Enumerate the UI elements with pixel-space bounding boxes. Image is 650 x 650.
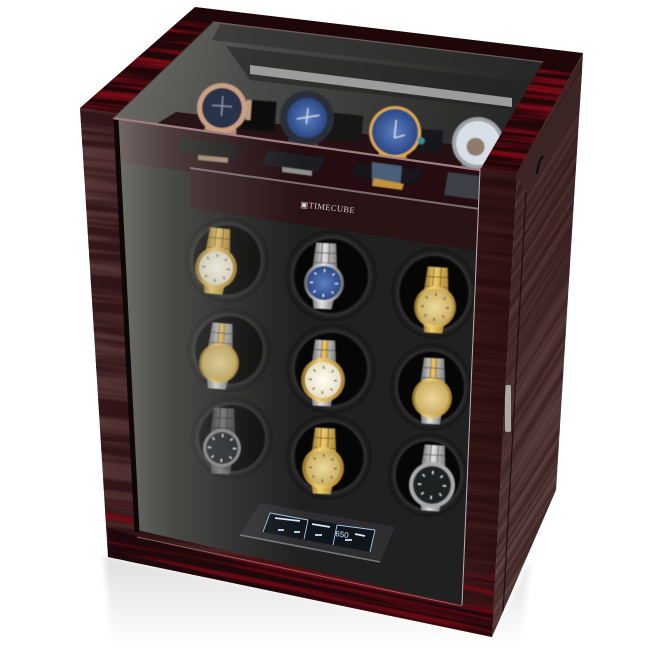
control display <box>240 503 395 562</box>
winder: row 3 left <box>198 403 273 475</box>
upper shelf <box>116 119 480 215</box>
winder: row 2 left <box>194 314 270 390</box>
door seam <box>503 192 526 612</box>
watch: black bezel blue dial <box>280 90 364 146</box>
LED strip <box>250 65 512 107</box>
right side panel <box>485 50 585 640</box>
watch: rose gold chronograph <box>196 82 277 134</box>
winder: row 3 centre <box>286 414 372 500</box>
floor reflection <box>104 556 530 644</box>
top wood panel <box>75 5 585 187</box>
winder: row 2 centre <box>286 324 376 414</box>
glass edge lines <box>113 118 480 170</box>
illustration: watch winder cabinet <box>80 7 583 637</box>
top miter <box>517 68 583 192</box>
watch: gold blue dial <box>368 105 444 158</box>
top glass and upper compartment <box>113 22 543 184</box>
screen value: 650 <box>335 529 350 540</box>
back panel <box>120 162 476 605</box>
rear band <box>212 24 543 78</box>
winder: row 3 right <box>388 433 468 517</box>
screen <box>263 513 375 552</box>
winder: row 2 right <box>390 343 472 431</box>
side highlight bar <box>505 385 511 432</box>
shelf <box>158 112 492 166</box>
front wood frame <box>75 104 525 650</box>
glass reflection <box>116 120 276 560</box>
watch: silver skeleton dial <box>451 116 502 170</box>
brand name: ▣TIMECUBE <box>300 199 356 215</box>
header with brand <box>190 167 480 251</box>
watch lower straps through glass <box>176 137 480 200</box>
winder: row 1 centre <box>285 230 377 322</box>
winder: row 1 left <box>192 223 268 296</box>
winder: row 1 right <box>391 247 477 339</box>
carry notch <box>537 156 543 174</box>
front glass interior <box>112 115 484 610</box>
bottom rail <box>108 528 505 637</box>
